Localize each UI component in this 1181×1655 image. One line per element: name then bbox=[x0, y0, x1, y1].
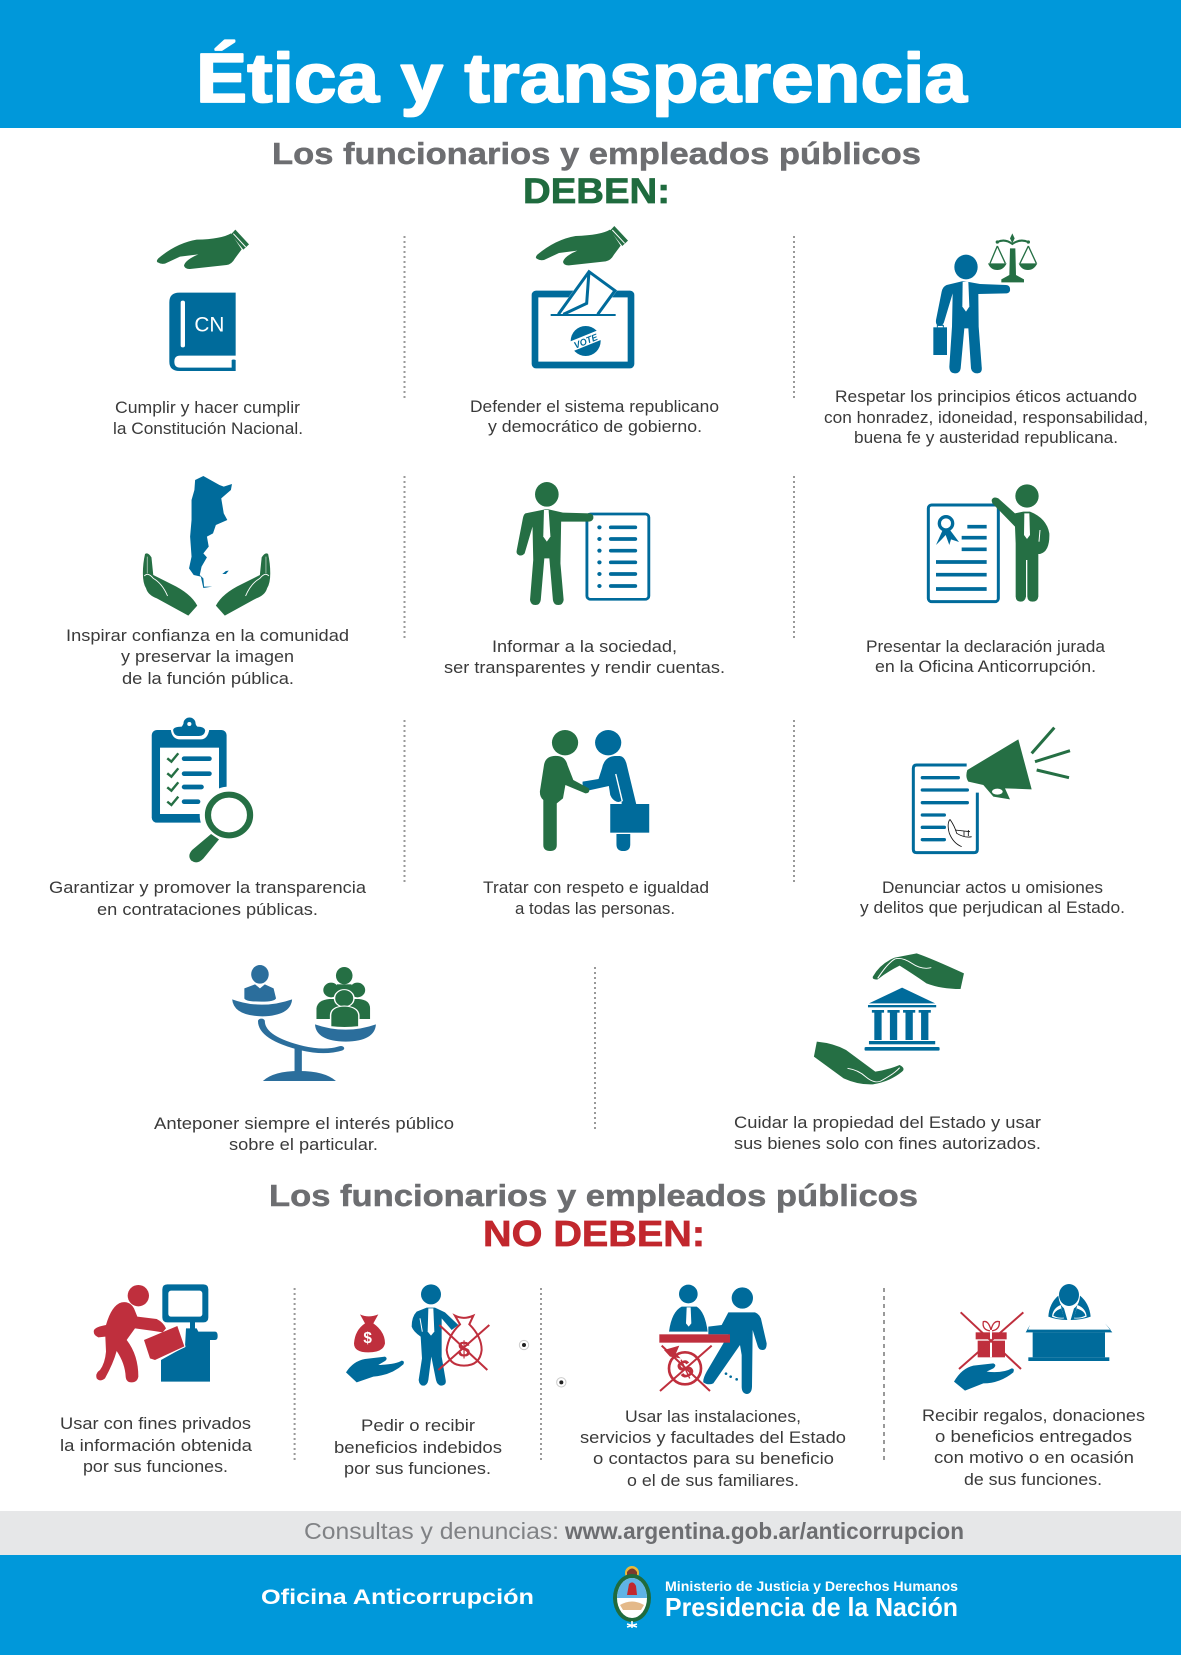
text: buena fe y austeridad republicana. bbox=[854, 428, 1118, 447]
icon: money bags and crossed bag bbox=[346, 1284, 566, 1387]
header band bbox=[0, 0, 1181, 128]
text bbox=[60, 1414, 253, 1476]
footer band bbox=[0, 1555, 1181, 1655]
text: de sus funciones. bbox=[964, 1470, 1102, 1489]
text bbox=[66, 626, 349, 688]
panel: pedir beneficios bbox=[334, 1284, 566, 1478]
text: Denunciar actos u omisiones bbox=[882, 878, 1103, 897]
text: con motivo o en ocasión bbox=[934, 1448, 1134, 1467]
text: en la Oficina Anticorrupción. bbox=[875, 657, 1096, 676]
text: o beneficios entregados bbox=[935, 1427, 1132, 1446]
text bbox=[824, 387, 1148, 447]
heading: no deben: Los funcionarios y empleados públicos bbox=[269, 1178, 918, 1213]
text: Cumplir y hacer cumplir bbox=[115, 398, 300, 417]
text: la Constitución Nacional. bbox=[113, 419, 303, 438]
panel: informar a la sociedad bbox=[444, 482, 725, 677]
text: Defender el sistema republicano bbox=[470, 397, 719, 416]
text: Recibir regalos, donaciones bbox=[922, 1406, 1145, 1425]
text: y delitos que perjudican al Estado. bbox=[860, 898, 1125, 917]
icon: handshake bbox=[540, 730, 649, 851]
text: Informar a la sociedad, bbox=[492, 637, 677, 656]
text: ser transparentes y rendir cuentas. bbox=[444, 658, 725, 677]
text: sus bienes solo con fines autorizados. bbox=[734, 1134, 1041, 1153]
icon: man presenting document bbox=[517, 482, 649, 605]
panel: usar información bbox=[60, 1284, 253, 1476]
text: en contrataciones públicas. bbox=[97, 900, 318, 919]
text bbox=[334, 1416, 502, 1478]
ministry and presidency: Ministerio de Justicia y Derechos Humanos bbox=[665, 1578, 958, 1594]
icon: hands around public building bbox=[814, 953, 964, 1084]
panel: usar instalaciones bbox=[580, 1285, 846, 1490]
panel: presentar declaración jurada bbox=[866, 484, 1106, 676]
icon: hand over ballot box: VOTE bbox=[572, 332, 600, 351]
panel: defender el sistema bbox=[470, 226, 719, 436]
text: Presentar la declaración jurada bbox=[866, 637, 1106, 656]
icon: document and megaphone bbox=[913, 728, 1070, 853]
text: Cuidar la propiedad del Estado y usar bbox=[734, 1113, 1041, 1132]
text: Inspirar confianza en la comunidad bbox=[66, 626, 349, 645]
icon: hands around map of Argentina bbox=[143, 476, 270, 616]
text: de la función pública. bbox=[122, 669, 294, 688]
heading: deben bbox=[272, 136, 921, 211]
text: servicios y facultades del Estado bbox=[580, 1428, 846, 1447]
text: y democrático de gobierno. bbox=[488, 417, 702, 436]
text: con honradez, idoneidad, responsabilidad, bbox=[824, 408, 1148, 427]
icon: balance of person and group bbox=[232, 965, 376, 1081]
contact band bbox=[0, 1511, 1181, 1555]
text: o el de sus familiares. bbox=[627, 1471, 799, 1490]
text: a todas las personas. bbox=[515, 899, 675, 918]
text bbox=[866, 637, 1106, 676]
ministry and presidency bbox=[665, 1578, 958, 1622]
text: beneficios indebidos bbox=[334, 1438, 502, 1457]
title: Ética y transparencia bbox=[196, 39, 968, 117]
panel: cumplir la constitución bbox=[113, 230, 303, 438]
panel: garantizar transparencia bbox=[49, 717, 367, 919]
ministry and presidency: Presidencia de la Nación bbox=[665, 1592, 958, 1622]
panel: recibir regalos bbox=[922, 1284, 1145, 1489]
text bbox=[483, 878, 709, 918]
icon: hand over constitution book bbox=[157, 230, 249, 371]
text: Anteponer siempre el interés público bbox=[154, 1114, 454, 1133]
text bbox=[580, 1407, 846, 1490]
contact band: Consultas y denuncias: bbox=[304, 1518, 559, 1544]
text bbox=[444, 637, 725, 677]
icon: man holding scales bbox=[933, 233, 1037, 373]
icon: man with certificate bbox=[928, 484, 1049, 602]
text: la información obtenida bbox=[60, 1436, 253, 1455]
heading: no deben bbox=[269, 1178, 918, 1254]
icon: money bags and crossed bag: $ bbox=[458, 1337, 470, 1362]
panel: cuidar la propiedad bbox=[734, 953, 1041, 1153]
text bbox=[860, 878, 1125, 917]
heading: no deben: NO DEBEN: bbox=[483, 1213, 705, 1254]
panel: tratar con respeto bbox=[483, 730, 709, 918]
text: Tratar con respeto e igualdad bbox=[483, 878, 709, 897]
text bbox=[734, 1113, 1041, 1153]
decorative registration marks bbox=[519, 1340, 566, 1387]
text: Usar las instalaciones, bbox=[625, 1407, 801, 1426]
icon: money bags and crossed bag: $ bbox=[363, 1330, 372, 1347]
text: Pedir o recibir bbox=[361, 1416, 475, 1435]
text bbox=[922, 1406, 1145, 1489]
text: Garantizar y promover la transparencia bbox=[49, 878, 367, 897]
text: sobre el particular. bbox=[229, 1135, 378, 1154]
icon: national coat of arms bbox=[613, 1566, 651, 1628]
icon: two men at desk with crossed money bbox=[659, 1285, 767, 1394]
text bbox=[154, 1114, 454, 1154]
icon: hand over ballot box bbox=[535, 226, 631, 365]
text: por sus funciones. bbox=[344, 1459, 491, 1478]
icon: hand over constitution book: CN bbox=[194, 313, 224, 337]
heading: deben: Los funcionarios y empleados públicos bbox=[272, 136, 921, 171]
organization name: Oficina Anticorrupción bbox=[261, 1586, 534, 1609]
text bbox=[470, 397, 719, 436]
panel: denunciar actos bbox=[860, 728, 1125, 917]
icon: two men at desk with crossed money: $ bbox=[673, 1354, 698, 1385]
icon: crossed gift and official at desk bbox=[954, 1284, 1112, 1391]
text: o contactos para su beneficio bbox=[593, 1449, 834, 1468]
text: y preservar la imagen bbox=[121, 647, 294, 666]
text: Usar con fines privados bbox=[60, 1414, 251, 1433]
text bbox=[49, 878, 367, 919]
text bbox=[113, 398, 303, 438]
panel: inspirar confianza bbox=[66, 476, 349, 688]
contact band: www.argentina.gob.ar/anticorrupcion bbox=[564, 1518, 964, 1544]
text: por sus funciones. bbox=[83, 1457, 228, 1476]
icon: clipboard and magnifier bbox=[152, 717, 258, 862]
panel: anteponer interés público bbox=[154, 965, 454, 1154]
panel: respetar principios éticos bbox=[824, 233, 1148, 447]
icon: person taking briefcase from computer bbox=[94, 1284, 218, 1382]
text: Respetar los principios éticos actuando bbox=[835, 387, 1137, 406]
heading: deben: DEBEN: bbox=[523, 172, 670, 211]
